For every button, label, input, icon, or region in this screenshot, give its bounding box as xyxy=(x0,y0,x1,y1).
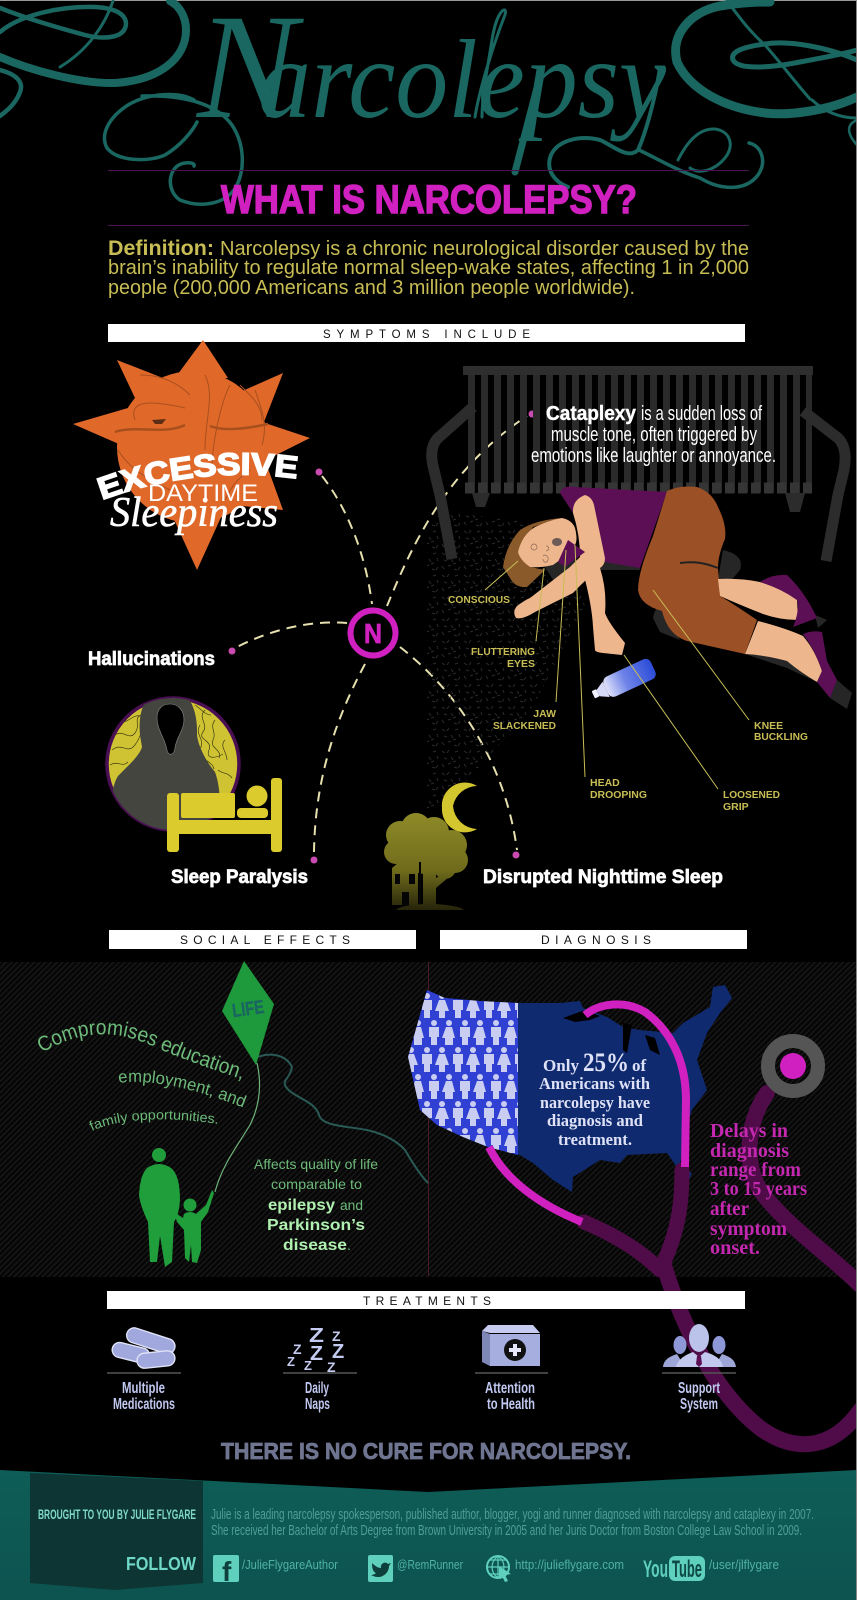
label: hallucinations: Hallucinations xyxy=(88,649,215,670)
footer social: youtube: You xyxy=(643,1556,668,1583)
definition text xyxy=(108,237,749,299)
text: delays in diagnosis: range from xyxy=(710,1159,801,1181)
icon: sleeping Zs: Z xyxy=(310,1343,323,1365)
icon: stethoscope xyxy=(489,1004,857,1444)
text: only 25 percent diagnosed: Only xyxy=(543,1056,579,1075)
cataplexy description: muscle tone, often triggered by xyxy=(551,424,757,446)
bench xyxy=(432,366,845,561)
connector end dots xyxy=(228,410,536,864)
definition text: brain’s inability to regulate normal sleep-wake states, affecting 1 in 2,000 xyxy=(108,257,749,279)
icon: sleeping Zs: Z xyxy=(332,1328,341,1344)
map: United States with people pattern xyxy=(408,985,732,1192)
icon: sleeping Zs: Z xyxy=(287,1354,295,1369)
curved text: compromises education xyxy=(38,1022,247,1130)
text: delays in diagnosis: after xyxy=(710,1198,749,1220)
top edge line xyxy=(0,0,857,1)
section divider xyxy=(428,962,429,1276)
treatment labels: Support xyxy=(678,1380,720,1397)
treatment labels: to Health xyxy=(487,1396,535,1413)
footer social: twitter xyxy=(368,1555,464,1582)
title: Narcolepsy with swashes xyxy=(0,0,857,204)
icon: orange sun with sleepy face xyxy=(73,340,310,570)
footer credit and bio xyxy=(38,1507,814,1539)
text: only 25 percent diagnosed: 25% xyxy=(583,1048,629,1077)
symptom callouts with leader lines: KNEE xyxy=(754,720,783,732)
symptom callouts with leader lines: SLACKENED xyxy=(493,720,556,732)
cataplexy description xyxy=(531,403,776,467)
text: delays in diagnosis: symptom xyxy=(710,1218,787,1240)
symptom callouts with leader lines: EYES xyxy=(507,658,535,670)
symptom callouts with leader lines: CONSCIOUS xyxy=(448,594,510,606)
treatment labels: Naps xyxy=(305,1396,330,1413)
icon: sleeping Zs: Z xyxy=(309,1325,324,1347)
cataplexy description: is a sudden loss of xyxy=(641,403,762,425)
curved text: compromises education: Compromises education, xyxy=(38,1022,242,1082)
footer social: website: http://julieflygare.com xyxy=(515,1557,624,1572)
footer social: facebook xyxy=(213,1555,339,1587)
icon: sleeping Zs: Z xyxy=(293,1341,302,1357)
icon: water bottle xyxy=(589,657,658,705)
label: excessive daytime sleepiness xyxy=(96,452,298,536)
icon: yellow bed with sleeper xyxy=(167,778,282,852)
speckled floor patch xyxy=(427,511,587,814)
label: excessive daytime sleepiness: Sleepiness xyxy=(110,490,278,536)
icon: sleeping Zs xyxy=(287,1325,344,1375)
text: delays in diagnosis: Delays in xyxy=(710,1120,788,1142)
hub: N circle xyxy=(350,610,396,656)
icon: parent and child silhouette xyxy=(139,1148,214,1267)
footer follow label: FOLLOW xyxy=(126,1554,196,1574)
section bar: symptoms include: SYMPTOMS INCLUDE xyxy=(323,329,530,341)
section bar: social effects: SOCIAL EFFECTS xyxy=(180,933,350,947)
textured band behind social effects and diagnosis xyxy=(0,962,857,1277)
footer band xyxy=(0,1470,857,1600)
text: quality of life comparison: . xyxy=(347,1237,351,1253)
text: quality of life comparison: Parkinson’s xyxy=(267,1217,365,1234)
icon: tree, house and crescent moon xyxy=(384,783,477,910)
symptom callouts with leader lines: JAW xyxy=(533,708,556,720)
text: quality of life comparison: comparable to xyxy=(271,1176,362,1192)
illustration: collapsed woman xyxy=(503,486,852,709)
heading: what is narcolepsy with rules: WHAT IS NARCOLEPSY? xyxy=(221,178,637,222)
symptom callouts with leader lines: HEAD xyxy=(590,777,620,789)
symptom callouts with leader lines: FLUTTERING xyxy=(471,646,535,658)
text: quality of life comparison: disease xyxy=(283,1237,347,1254)
text: quality of life comparison: and xyxy=(340,1197,363,1213)
text: only 25 percent diagnosed: treatment. xyxy=(558,1130,632,1149)
icon: sleeping Zs: Z xyxy=(304,1358,312,1373)
icon: sleeping Zs: Z xyxy=(327,1359,336,1375)
treatment labels: Daily xyxy=(305,1380,329,1397)
footer dark credit panel xyxy=(30,1473,203,1590)
treatment rules xyxy=(107,1372,736,1374)
text: delays in diagnosis: 3 to 15 years xyxy=(710,1178,807,1200)
cataplexy description: Cataplexy xyxy=(546,403,637,425)
kite ribbon tail xyxy=(258,1055,428,1183)
icon: medical box xyxy=(482,1325,540,1366)
section bar: social effects xyxy=(109,930,416,949)
hub: N circle: N xyxy=(364,618,382,649)
text: only 25 percent diagnosed: narcolepsy have xyxy=(540,1093,650,1112)
symptom callouts with leader lines: DROOPING xyxy=(590,789,647,801)
diagram: dashed connectors xyxy=(237,416,527,852)
icon: support group xyxy=(663,1324,736,1367)
icon: hooded ghost in yellow circle xyxy=(107,688,239,840)
label: excessive daytime sleepiness: DAYTIME xyxy=(148,480,258,507)
definition text: Definition: xyxy=(108,237,214,260)
label: disrupted nighttime sleep: Disrupted Nighttime Sleep xyxy=(483,867,723,888)
text: delays in diagnosis: diagnosis xyxy=(710,1140,789,1162)
section bar: symptoms include xyxy=(108,324,745,342)
icon: medication capsules xyxy=(111,1326,177,1369)
treatment labels: Multiple xyxy=(122,1380,165,1397)
text: quality of life comparison: Affects quality of life xyxy=(254,1156,378,1172)
definition text: Narcolepsy is a chronic neurological disorder caused by the xyxy=(220,238,749,260)
treatment labels: Medications xyxy=(113,1396,175,1413)
footer social: youtube xyxy=(643,1556,779,1583)
title: Narcolepsy with swashes: arcolepsy xyxy=(258,18,666,142)
text: quality of life comparison: epilepsy xyxy=(268,1197,335,1214)
definition text: people (200,000 Americans and 3 million people worldwide). xyxy=(108,277,635,299)
text: only 25 percent diagnosed: of xyxy=(632,1056,646,1075)
footer social: twitter: @RemRunner xyxy=(397,1557,464,1572)
cataplexy description: emotions like laughter or annoyance. xyxy=(531,445,776,467)
footer social: facebook: f xyxy=(222,1556,232,1587)
statement: no cure: THERE IS NO CURE FOR NARCOLEPSY. xyxy=(221,1438,631,1464)
footer social: youtube: /user/jlflygare xyxy=(709,1557,779,1572)
section bar: treatments xyxy=(107,1291,745,1309)
symptom callouts with leader lines xyxy=(448,545,808,813)
text: delays in diagnosis xyxy=(710,1120,807,1259)
footer social: website xyxy=(487,1556,624,1582)
label: sleep paralysis: Sleep Paralysis xyxy=(171,867,308,888)
label: excessive daytime sleepiness: EXCESSIVE xyxy=(96,452,298,500)
text: delays in diagnosis: onset. xyxy=(710,1237,760,1259)
curved text: compromises education: family opportunities. xyxy=(89,1110,218,1130)
text: quality of life comparison xyxy=(254,1156,378,1254)
icon: LIFE kite: LIFE xyxy=(231,997,266,1022)
symptom callouts with leader lines: BUCKLING xyxy=(754,731,808,743)
right edge line xyxy=(856,0,857,1600)
treatment labels: Attention xyxy=(485,1380,535,1397)
treatment labels xyxy=(113,1380,720,1413)
icon: LIFE kite xyxy=(222,961,274,1065)
footer social: facebook: /JulieFlygareAuthor xyxy=(242,1557,339,1572)
section bar: diagnosis: DIAGNOSIS xyxy=(541,933,651,947)
text: only 25 percent diagnosed: Americans with xyxy=(539,1074,651,1093)
section bar: diagnosis xyxy=(440,930,747,949)
symptom callouts with leader lines: LOOSENED xyxy=(723,789,780,801)
symptom callouts with leader lines: GRIP xyxy=(723,801,749,813)
text: only 25 percent diagnosed xyxy=(539,1048,651,1149)
section bar: treatments: TREATMENTS xyxy=(363,1294,491,1308)
kite string xyxy=(215,1063,260,1192)
icon: sleeping Zs: Z xyxy=(332,1341,344,1363)
footer credit and bio: BROUGHT TO YOU BY JULIE FLYGARE xyxy=(38,1507,196,1522)
treatment labels: System xyxy=(680,1396,718,1413)
curved text: compromises education: employment, and xyxy=(118,1070,247,1108)
text: only 25 percent diagnosed: diagnosis and xyxy=(547,1111,644,1130)
footer social: youtube: Tube xyxy=(672,1556,702,1583)
